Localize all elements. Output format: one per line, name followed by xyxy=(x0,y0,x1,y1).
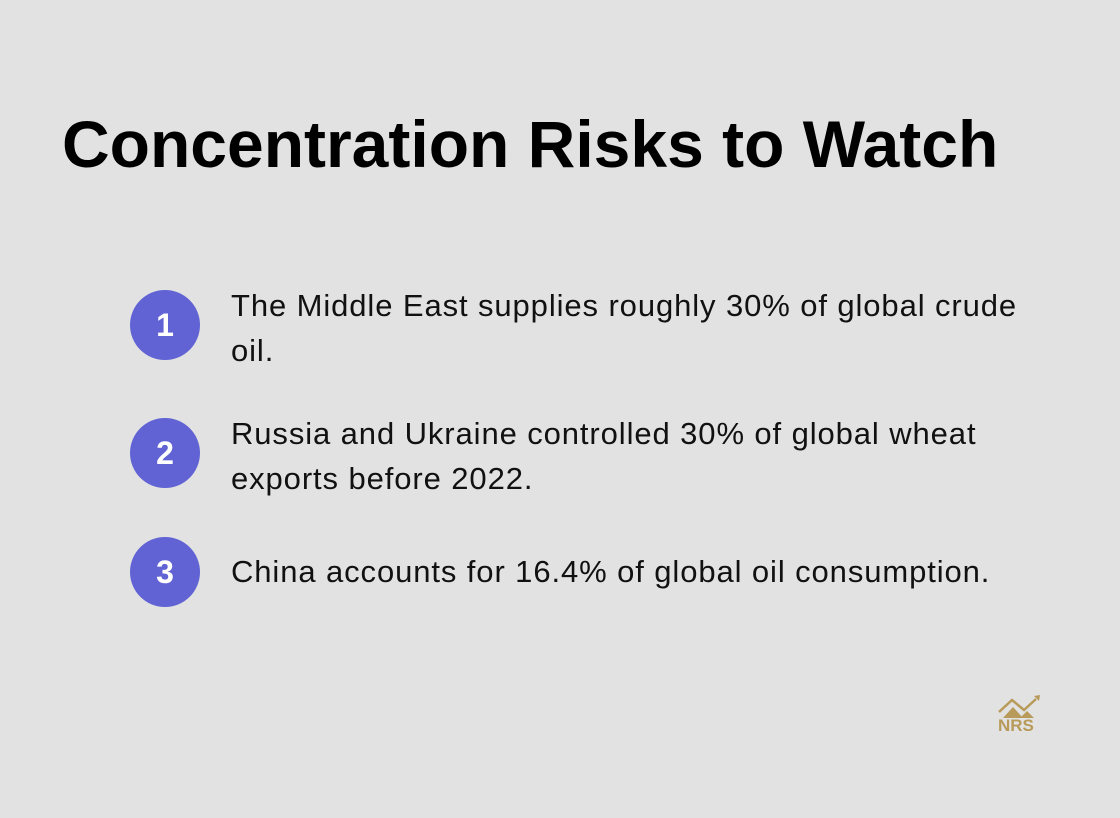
item 2 xyxy=(130,416,976,496)
text 2: Russia and Ukraine controlled 30% of global wheat xyxy=(231,416,976,451)
text 1 xyxy=(231,288,1017,368)
logo xyxy=(998,695,1040,735)
item 1 xyxy=(130,288,1017,368)
text 2 xyxy=(231,416,976,496)
badge 2: 2 xyxy=(156,435,174,471)
badge 2 xyxy=(130,418,200,488)
text 1: The Middle East supplies roughly 30% of global crude xyxy=(231,288,1017,323)
logo text: NRS xyxy=(998,716,1034,735)
text 2: exports before 2022. xyxy=(231,461,533,496)
text 1: oil. xyxy=(231,333,274,368)
item 3 xyxy=(130,537,990,607)
text 3: China accounts for 16.4% of global oil consumption. xyxy=(231,554,990,589)
badge 1 xyxy=(130,290,200,360)
logo icon xyxy=(998,695,1040,718)
badge 1: 1 xyxy=(156,307,174,343)
badge 3 xyxy=(130,537,200,607)
title: Concentration Risks to Watch xyxy=(62,107,998,181)
badge 3: 3 xyxy=(156,554,174,590)
